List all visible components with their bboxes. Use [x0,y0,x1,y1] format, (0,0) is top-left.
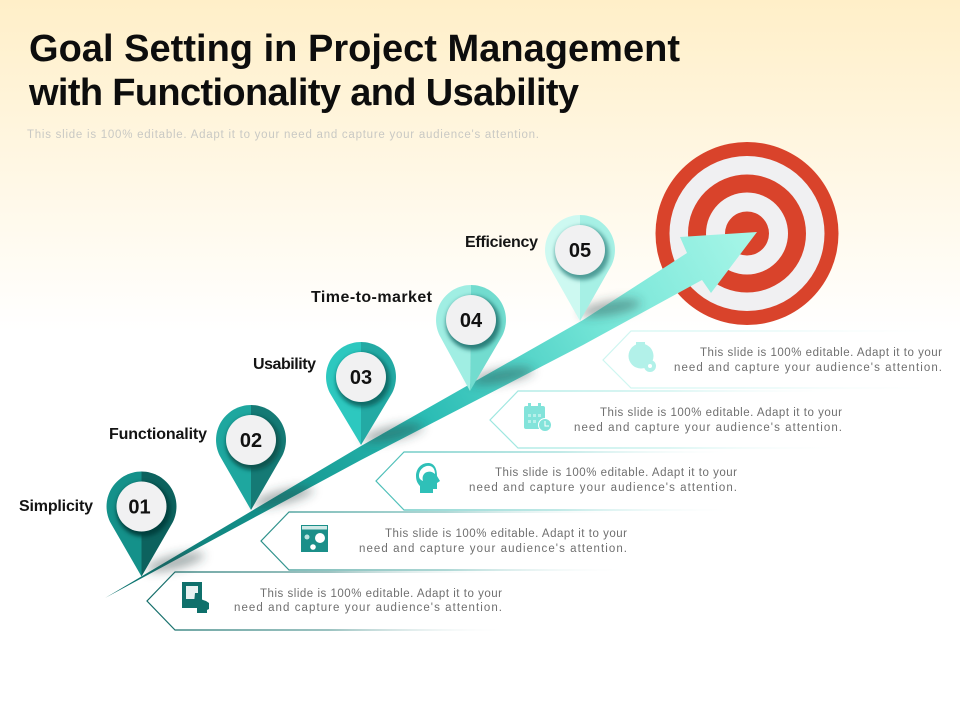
pin 04: 04 [460,310,483,332]
text 3: need and capture your audience's attention. [469,482,737,494]
tag 4 [490,391,850,448]
title: with Functionality and Usability [28,72,579,114]
text 4 [574,407,842,434]
text 2 [359,528,627,555]
pin 02 [216,405,286,510]
text 4: need and capture your audience's attention. [574,422,842,434]
pin 02: 02 [240,430,262,452]
pin 05: 05 [569,240,591,262]
pin 03: 03 [350,367,372,389]
label: Simplicity: Simplicity [19,498,93,515]
icon: browser and gears [301,525,328,552]
pin shadows [144,296,642,576]
text 5: This slide is 100% editable. Adapt it to your [700,347,942,359]
icon: calendar and clock [524,403,552,432]
tag 5 [603,331,950,388]
text 2: This slide is 100% editable. Adapt it to your [385,528,627,540]
tag 2 [261,512,630,570]
label: Time-to-market: Time-to-market [311,289,433,306]
text 1 [234,588,502,614]
text 1: This slide is 100% editable. Adapt it to your [260,588,502,600]
pin 01 [107,472,176,576]
label: Functionality: Functionality [109,426,207,443]
text 4: This slide is 100% editable. Adapt it to your [600,407,842,419]
icon: clock and gear [628,342,656,372]
target [656,142,838,325]
title [28,28,680,114]
tag 3 [376,452,740,510]
subtitle: This slide is 100% editable. Adapt it to your need and capture your audience's attention. [27,129,539,141]
tag 1 [147,572,510,630]
text 3 [469,467,737,494]
pin 04 [436,285,506,391]
text 5 [674,347,942,374]
text 5: need and capture your audience's attention. [674,362,942,374]
icon: tablet and hand [182,582,209,613]
title: Goal Setting in Project Management [29,28,680,70]
label: Usability: Usability [253,356,316,373]
label: Efficiency: Efficiency [465,234,538,251]
pin 01: 01 [128,496,151,518]
text 3: This slide is 100% editable. Adapt it to your [495,467,737,479]
text 2: need and capture your audience's attention. [359,543,627,555]
pin 05 [545,215,615,321]
icon: head [416,463,440,493]
text 1: need and capture your audience's attention. [234,602,502,614]
growth arrow [105,232,757,598]
pin 03 [326,342,396,445]
